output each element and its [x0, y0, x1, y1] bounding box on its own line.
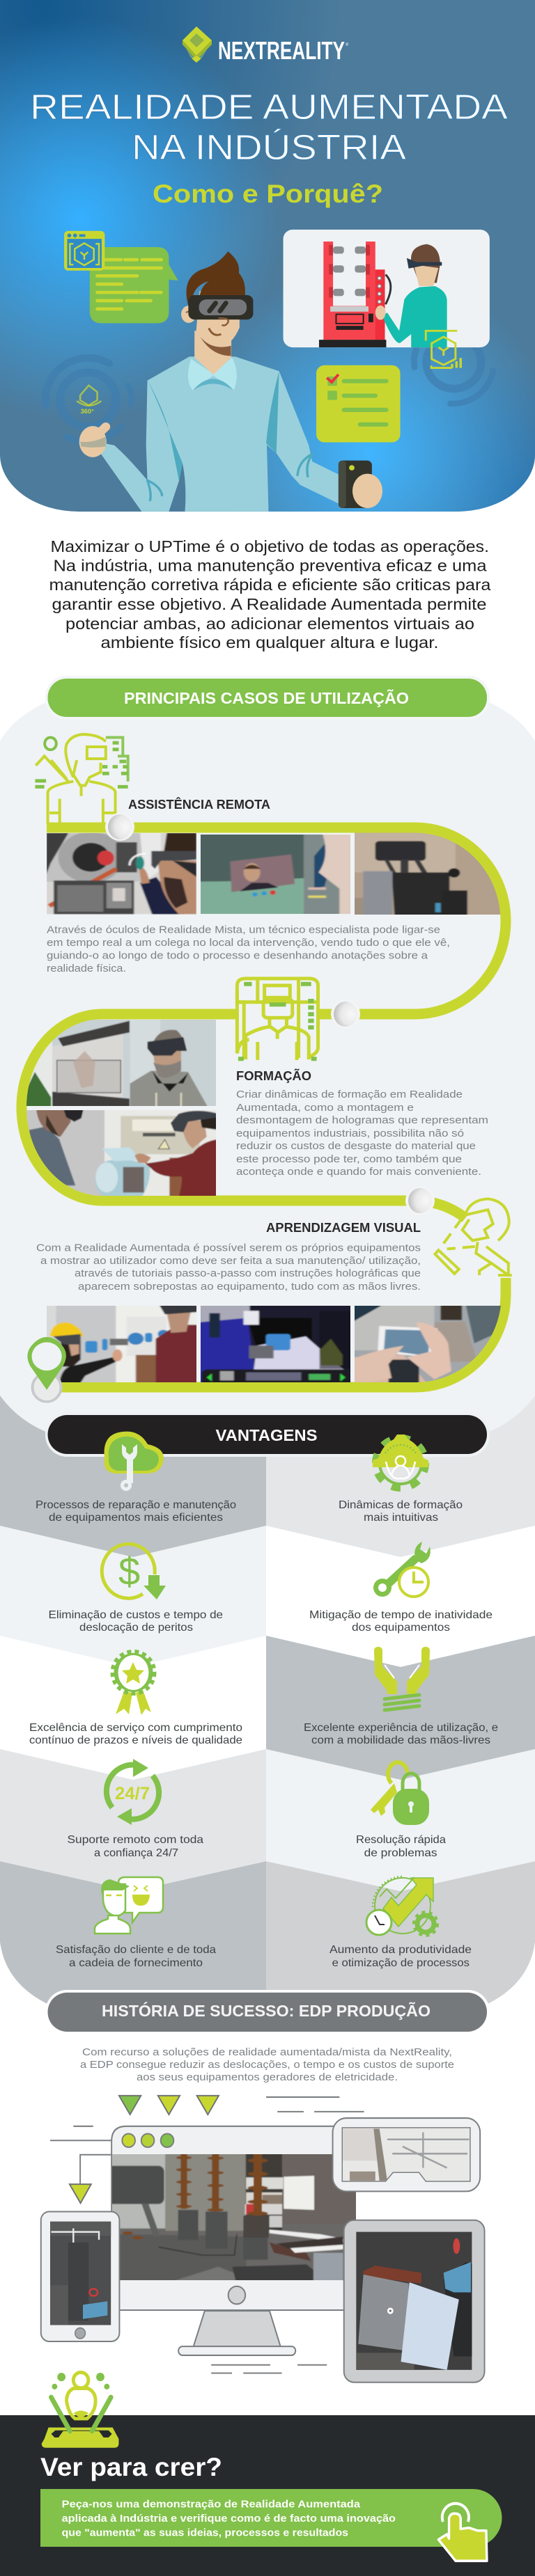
text: story description: a EDP consegue reduzir as deslocações, o tempo e os custos de suporte: [80, 2059, 454, 2071]
illustration: header scene: [45, 230, 493, 512]
text: advantage 7: Suporte remoto com toda: [67, 1834, 203, 1846]
heading: história de sucesso: [45, 1990, 490, 2034]
text: visual learning description: Com a Realidade Aumentada é possível serem os próprios equipamentos: [36, 1242, 421, 1254]
icon: hologram person: [42, 2372, 118, 2448]
text: visual learning description: aparecem sobrepostas ao equipamento, tudo com as mãos livres.: [78, 1281, 421, 1293]
text: remote assistance description: Através de óculos de Realidade Mista, um técnico especialista pode ligar-se: [47, 924, 440, 935]
text: advantage 5: contínuo de prazos e níveis de qualidade: [29, 1735, 242, 1746]
monitor stand: [178, 2311, 295, 2355]
text: remote assistance description: [47, 924, 450, 974]
icon: cube overlay: [426, 331, 460, 368]
text: training description: Criar dinâmicas de formação em Realidade: [236, 1089, 463, 1100]
heading: vantagens: [45, 1412, 490, 1457]
icon: hands free: [374, 1647, 430, 1710]
panel: use cases background: [0, 702, 535, 1432]
icon: 360 rings: 360°: [81, 408, 94, 415]
icon: cost reduction: [102, 1544, 166, 1599]
photo: remote assistance engine: [47, 833, 196, 915]
intro text: potenciar ambas, ao adicionar elementos virtuais ao: [65, 615, 474, 633]
text: advantage 4: dos equipamentos: [352, 1622, 450, 1634]
heading: principais casos de utilização: PRINCIPAIS CASOS DE UTILIZAÇÃO: [124, 688, 409, 707]
text: advantage 10: [329, 1944, 472, 1969]
text: visual learning description: a mostrar ao utilizador como deve ser feita a sua manutenção/ utilização,: [40, 1255, 421, 1267]
text: advantage 5: [29, 1722, 242, 1746]
title: [30, 87, 508, 167]
text: assistência remota: ASSISTÊNCIA REMOTA: [128, 797, 270, 812]
text: training description: aconteça onde e quando for mais conveniente.: [236, 1166, 481, 1178]
text: advantage 1: Processos de reparação e manutenção: [36, 1499, 236, 1511]
monitor buttons: [122, 2134, 245, 2304]
text: advantage 3: deslocação de peritos: [79, 1622, 193, 1634]
title: REALIDADE AUMENTADA: [30, 87, 508, 127]
monitor frame: [111, 2126, 345, 2310]
knob: [405, 1186, 435, 1215]
photo: 3D substation: [112, 2154, 356, 2280]
text: advantage 2: Dinâmicas de formação: [339, 1499, 463, 1511]
photo: visual tutorial phone car: [355, 1306, 501, 1382]
text: training description: equipamentos industriais, possibilita não só: [236, 1128, 464, 1139]
text: advantage 4: [309, 1609, 493, 1634]
knob: [331, 999, 360, 1029]
text: advantage 7: a confiança 24/7: [94, 1847, 178, 1859]
text: visual learning description: [36, 1242, 421, 1293]
panel: header background: [0, 0, 535, 515]
icon: signal rings: [411, 341, 493, 406]
text: training description: reduzir os custos de desgaste do material que: [236, 1140, 476, 1152]
icon: key and lock: [371, 1762, 429, 1825]
text: training description: Aumentada, como a montagem e: [236, 1102, 414, 1114]
photo: training hand interface: [23, 1016, 218, 1109]
heading: vantagens: VANTAGENS: [216, 1426, 318, 1444]
icon: pointing hand: [438, 2504, 487, 2561]
icon: 24/7: [107, 1759, 159, 1825]
text: remote assistance description: realidade física.: [47, 963, 126, 974]
text: advantage 1: [36, 1499, 236, 1524]
text: advantage 9: Satisfação do cliente e de toda: [56, 1944, 216, 1956]
text: advantage 5: Excelência de serviço com cumprimento: [29, 1722, 242, 1734]
icon: visual learning: [435, 1199, 512, 1275]
text: advantage 2: mais intuitivas: [364, 1512, 438, 1524]
text: advantage 2: [339, 1499, 463, 1524]
icon: gear person: [373, 1435, 428, 1488]
intro text: Maximizar o UPTime é o objetivo de todas as operações.: [50, 537, 489, 555]
logo: NextReality: ®: [346, 42, 349, 47]
icon: 24/7: 24/7: [115, 1784, 150, 1803]
photo: visual tutorial scope: [201, 1306, 350, 1382]
icon: remote assistant: [35, 734, 128, 824]
knob: [105, 813, 134, 841]
subtitle: Como e Porquê?: [153, 180, 383, 208]
text: advantage 8: Resolução rápida: [356, 1834, 446, 1846]
text: advantage 9: [56, 1944, 216, 1969]
text: training description: desmontagem de hologramas que representam: [236, 1114, 488, 1126]
text: remote assistance description: guiando-o ao longo de todo o processo e desenhando anotações sobre a: [47, 950, 428, 962]
logo: NextReality: [183, 26, 349, 65]
text: story description: [80, 2046, 454, 2083]
text: aprendizagem visual: APRENDIZAGEM VISUAL: [266, 1221, 421, 1235]
text: advantage 8: de problemas: [364, 1847, 437, 1859]
icon: satisfied customer: [95, 1877, 163, 1934]
character: man with AR glasses: [100, 251, 339, 512]
intro text: Na indústria, uma manutenção preventiva eficaz e uma: [53, 557, 487, 575]
device: phone: [41, 2211, 119, 2341]
path: lime route: [22, 828, 506, 1387]
text: advantage 4: Mitigação de tempo de inatividade: [309, 1609, 493, 1621]
photo: remote video call: [201, 835, 350, 914]
decorative triangles: [50, 2096, 364, 2373]
text: advantage 7: [67, 1834, 203, 1859]
text: advantage 6: com a mobilidade das mãos-livres: [311, 1735, 490, 1746]
icon: training: [235, 977, 319, 1060]
illustration: devices: [50, 2096, 364, 2373]
text: story description: aos seus equipamentos geradores de eletricidade.: [137, 2071, 398, 2083]
callout: demo request: aplicada à Indústria e verifique como é de facto uma inovação: [62, 2513, 396, 2524]
checklist card: [316, 365, 401, 442]
heading: principais casos de utilização: [45, 676, 490, 720]
device: tablet: [344, 2220, 485, 2383]
text: story description: Com recurso a soluções de realidade aumentada/mista da NextReality,: [82, 2046, 452, 2058]
icon: pin: [27, 1337, 66, 1402]
text: formação: FORMAÇÃO: [236, 1068, 311, 1083]
text: advantage 3: [49, 1609, 223, 1634]
intro text: garantir esse objetivo. A Realidade Aumentada permite: [52, 595, 486, 613]
callout: demo request: Peça-nos uma demonstração de Realidade Aumentada: [62, 2499, 361, 2511]
text: advantage 9: a cadeia de fornecimento: [69, 1957, 203, 1969]
callout: demo request: que "aumenta" as suas ideias, processos e resultados: [62, 2527, 348, 2539]
icon: rosette: [113, 1652, 155, 1715]
icon: cloud wrench: [104, 1432, 164, 1491]
text: advantage 10: Aumento da produtividade: [329, 1944, 472, 1956]
heading: ver para crer: Ver para crer?: [40, 2453, 222, 2481]
photo: transformer: [355, 832, 500, 915]
text: advantage 8: [356, 1834, 446, 1859]
intro text: manutenção corretiva rápida e eficiente são criticas para: [49, 576, 491, 594]
title: NA INDÚSTRIA: [132, 127, 406, 167]
phone in hand: [339, 461, 382, 508]
text: advantage 10: e otimização de processos: [332, 1957, 470, 1969]
icon: productivity chart: [366, 1876, 437, 1936]
icon: wrench clock: [373, 1542, 431, 1597]
speech bubble: [90, 247, 178, 323]
chevron grid: advantages background left and right: [0, 1385, 535, 2005]
icon: browser cube: [64, 231, 104, 271]
photo card: machine and technician: [284, 230, 490, 347]
text: advantage 6: Excelente experiência de utilização, e: [304, 1722, 498, 1734]
hand with thumb: [79, 426, 107, 457]
photo: training motor hologram: [23, 1107, 218, 1199]
text: training description: este processo pode ter, como também que: [236, 1153, 462, 1165]
text: advantage 1: de equipamentos mais eficientes: [49, 1512, 223, 1524]
intro text: [49, 537, 491, 651]
callout: demo request: [40, 2489, 502, 2547]
text: advantage 3: Eliminação de custos e tempo de: [49, 1609, 223, 1621]
text: advantage 6: [304, 1722, 498, 1746]
heading: história de sucesso: HISTÓRIA DE SUCESSO: EDP PRODUÇÃO: [102, 2001, 431, 2020]
icon: cost reduction: $: [118, 1549, 140, 1593]
icon: 360 rings: [45, 358, 131, 442]
text: training description: [236, 1089, 488, 1178]
logo: NextReality: NEXTREALITY: [218, 36, 345, 65]
photo: visual tutorial with helmet: [47, 1306, 196, 1382]
text: remote assistance description: em tempo real a um colega no local da intervenção, vendo tudo o que ele vê,: [47, 937, 450, 949]
intro text: ambiente físico em qualquer altura e lugar.: [100, 633, 439, 651]
panel: call to action band: [0, 2415, 535, 2576]
device: VR viewer: [333, 2118, 480, 2191]
text: visual learning description: através de tutoriais passo-a-passo com instruções holográficas que: [75, 1267, 421, 1279]
